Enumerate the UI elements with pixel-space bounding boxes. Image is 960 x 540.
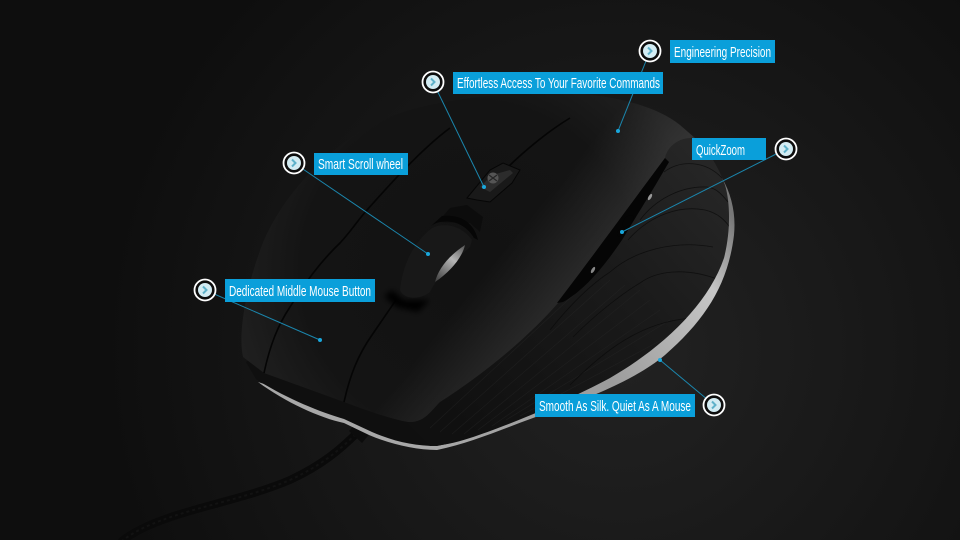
textured palm side: [408, 137, 732, 446]
scroll wheel: [384, 205, 483, 312]
callout: Engineering Precision: [616, 40, 775, 133]
braided cable: [122, 421, 372, 540]
command button: [467, 163, 520, 202]
mouse illustration: [210, 104, 734, 507]
callout: Effortless Access: Effortless Access To Your Favorite Commands: [457, 75, 660, 92]
callout: Dedicated Middle Mouse Button: Dedicated Middle Mouse Button: [229, 283, 371, 300]
silver base band: [258, 178, 734, 450]
black lower shell: [246, 300, 600, 446]
callout: QuickZoom: QuickZoom: [696, 142, 745, 159]
button seams: [264, 118, 570, 402]
callout: Smooth As Silk: [535, 358, 724, 417]
palm contour lines: [550, 164, 732, 385]
callout: Dedicated Middle Mouse Button: [194, 279, 375, 342]
callout: QuickZoom: [620, 138, 796, 234]
top shell: [241, 93, 695, 422]
callout: Smart Scroll wheel: [284, 152, 430, 256]
palm fine lines: [430, 308, 636, 434]
callout: Smooth As Silk: Smooth As Silk. Quiet As A Mouse: [539, 398, 691, 415]
callout: Engineering Precision: Engineering Precision: [674, 44, 771, 61]
side channel with buttons: [557, 158, 669, 303]
callout: Effortless Access: [422, 72, 663, 189]
callout: Smart Scroll wheel: Smart Scroll wheel: [318, 156, 403, 173]
